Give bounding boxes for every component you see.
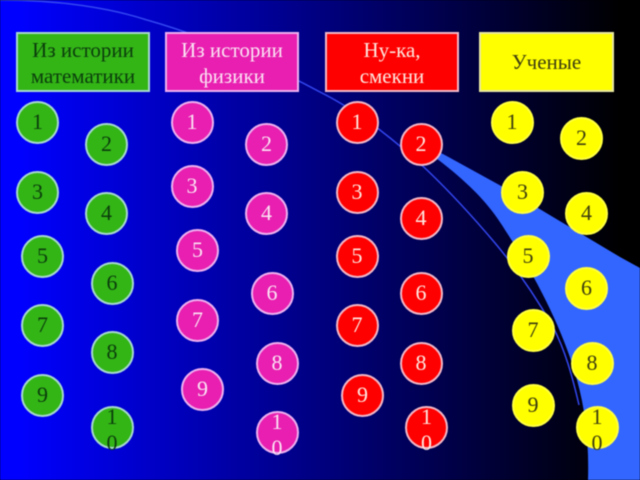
column: puzzle circles: 3	[352, 178, 362, 204]
column: physics circles: 4	[261, 200, 272, 224]
column: scientists circles: 3	[517, 178, 528, 204]
column: mathematics circles: 3	[32, 178, 43, 204]
column: physics circles: 3	[186, 173, 198, 198]
column: mathematics circles: 0	[106, 430, 118, 455]
column: physics circles: 0	[272, 435, 282, 460]
column: physics circles: 8	[272, 350, 282, 374]
column: physics circles: 9	[197, 376, 208, 400]
column: puzzle circles: 2	[416, 130, 426, 156]
column: physics circles: 1	[186, 109, 198, 134]
column: puzzle circles: 1	[352, 109, 362, 134]
column: puzzle circles: 9	[357, 382, 368, 406]
column: puzzle circles: 7	[352, 312, 362, 336]
column: puzzle circles: 8	[416, 350, 426, 374]
heading: history of physics	[165, 32, 299, 92]
heading: history of mathematics	[16, 32, 150, 92]
column: scientists circles: 0	[592, 430, 602, 455]
column: physics circles: 5	[192, 237, 203, 262]
column: mathematics circles: 9	[37, 382, 48, 406]
heading: history of physics: физики	[199, 64, 265, 88]
column: scientists circles: 9	[528, 392, 538, 416]
column: puzzle circles: 0	[421, 430, 432, 455]
column: scientists circles: 1	[506, 109, 518, 134]
column: scientists circles: 6	[581, 274, 592, 300]
column: puzzle circles: 4	[416, 205, 426, 230]
column: physics circles: 6	[266, 280, 278, 304]
column: mathematics circles: 6	[106, 270, 118, 294]
column: mathematics circles: 8	[106, 338, 118, 364]
column: scientists circles: 1	[592, 404, 602, 429]
column: puzzle circles: 5	[352, 242, 362, 268]
column: mathematics circles	[15, 100, 135, 455]
heading: history of mathematics: математики	[31, 64, 135, 88]
column: mathematics circles: 4	[101, 200, 112, 224]
column: scientists circles	[490, 100, 620, 455]
column: physics circles: 2	[261, 130, 272, 156]
column: scientists circles: 2	[576, 125, 587, 150]
column: mathematics circles: 1	[106, 404, 118, 429]
column: mathematics circles: 1	[32, 109, 43, 134]
heading: come on, figure it out	[325, 32, 459, 92]
column: scientists circles: 7	[528, 317, 538, 342]
heading: scientists	[479, 32, 614, 92]
column: scientists circles: 4	[581, 200, 592, 224]
column: physics circles	[170, 100, 300, 460]
column: physics circles: 7	[192, 306, 203, 332]
column: mathematics circles: 7	[37, 312, 48, 336]
column: mathematics circles: 2	[101, 130, 112, 156]
column: puzzle circles: 1	[421, 404, 432, 429]
column: puzzle circles: 6	[416, 280, 426, 304]
column: puzzle circles	[335, 100, 449, 455]
column: scientists circles: 5	[522, 242, 534, 268]
heading: come on, figure it out: Ну-ка,	[363, 38, 421, 62]
heading: history of physics: Из истории	[181, 38, 283, 62]
column: mathematics circles: 5	[37, 242, 48, 268]
column: physics circles: 1	[272, 409, 282, 434]
column: scientists circles: 8	[586, 350, 598, 374]
heading: scientists: Ученые	[512, 50, 581, 74]
heading: come on, figure it out: смекни	[360, 64, 424, 88]
heading: history of mathematics: Из истории	[32, 38, 134, 62]
